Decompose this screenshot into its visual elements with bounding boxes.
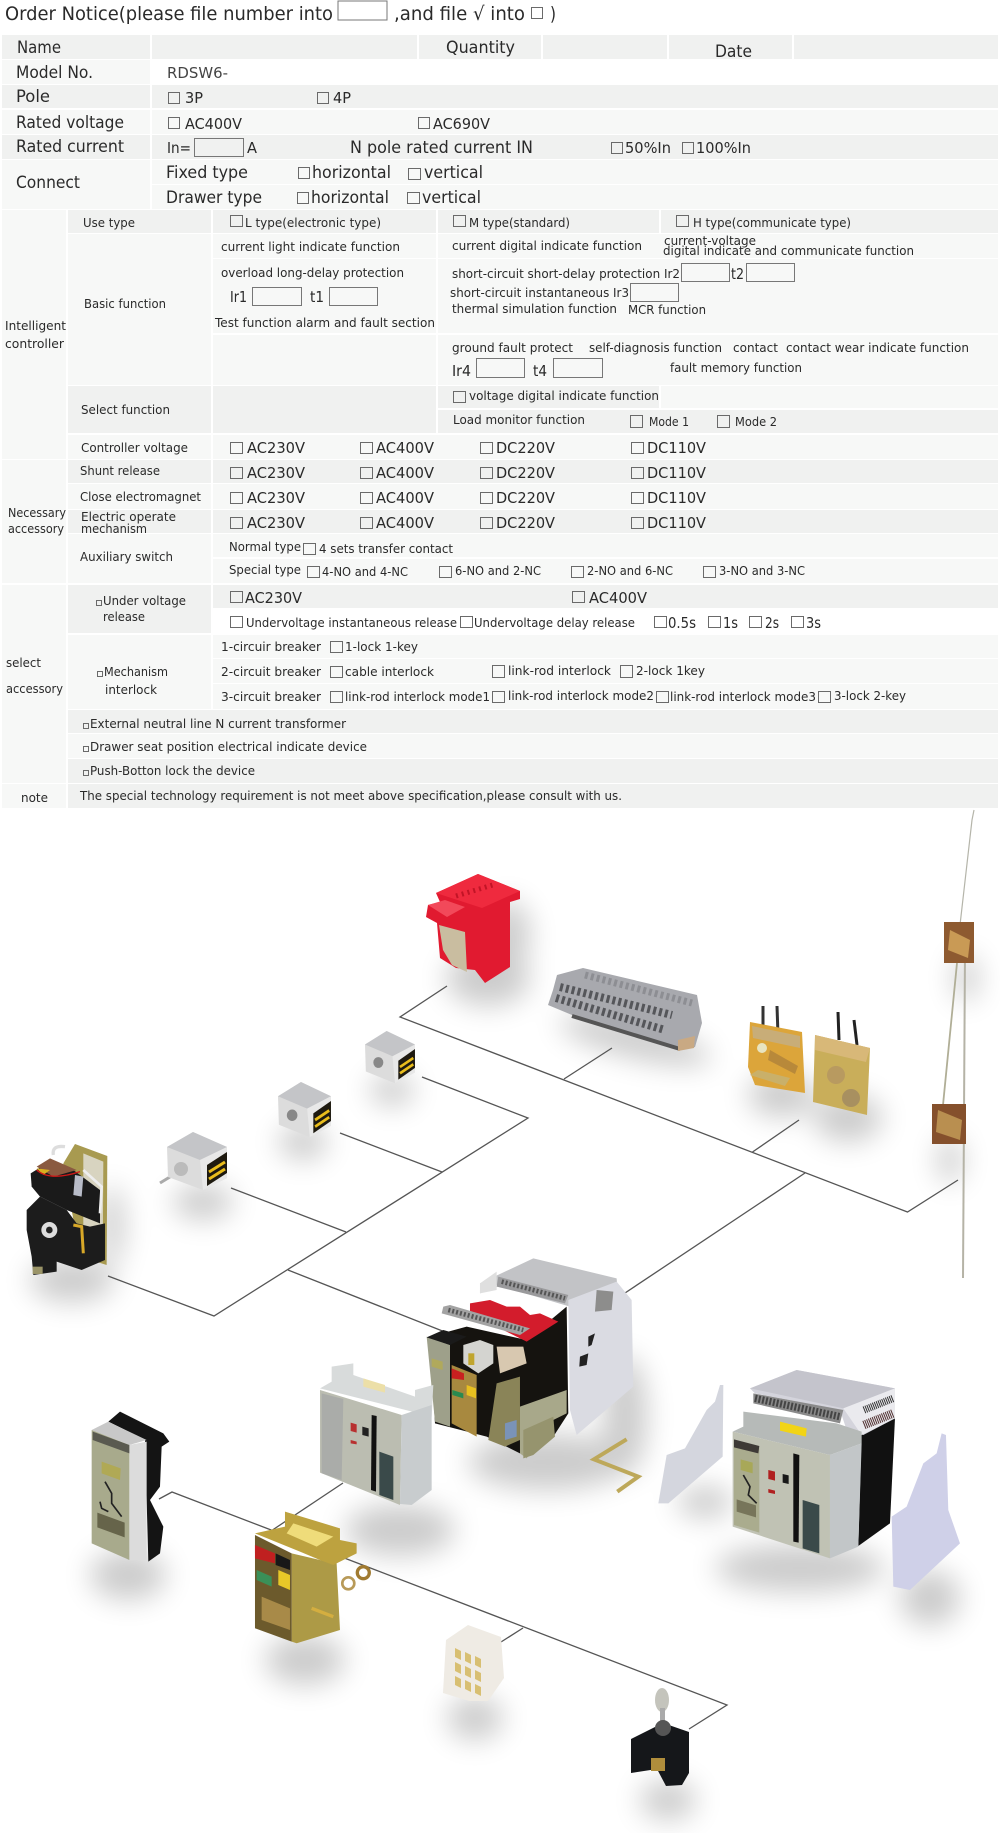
title: order notice heading: ,and file √ into [394,3,525,25]
row: under voltage release: 0.5s [668,614,696,632]
row: note [2,784,998,808]
row: shunt release: DC110V [647,464,707,482]
row: controller voltage: DC220V [496,439,556,457]
row: auxiliary switch: Special type [229,562,301,577]
row: mechanism interlock: 2-lock 1key [636,663,706,678]
product: link rods with brackets [932,810,974,1278]
row: auxiliary switch: 4-NO and 4-NC [322,564,408,579]
row: use type: Use type [83,215,135,230]
row: close electromagnet: Close electromagnet [80,489,201,504]
row: basic function: fault memory function [670,360,802,375]
row: basic function [68,233,998,385]
row: rated current [2,135,998,159]
row: auxiliary switch: 3-NO and 3-NC [719,563,805,578]
row: basic function: current light indicate function [221,239,400,254]
row: mechanism interlock: 1-lock 1-key [345,639,419,654]
row: basic function: ground fault protect [452,340,573,355]
bracket upper [944,922,974,963]
row: mechanism interlock: cable interlock [345,664,435,679]
product: white secondary connector [443,1625,504,1701]
product: small solenoid box C with shaft [160,1132,227,1190]
row: rated current: In= [167,139,191,157]
row: pole: Pole [16,87,50,106]
product: central breaker with open cover [320,1258,638,1505]
row: name quantity date [2,35,998,61]
row: electric operate mechanism: DC110V [647,514,707,532]
row: close electromagnet: DC110V [647,489,707,507]
row: basic function: t4 [533,362,547,380]
row: under voltage release: Undervoltage delay release [474,615,635,630]
row: auxiliary switch [68,534,998,583]
row: model number [2,60,228,84]
product: assembled breaker with side plates [658,1370,960,1590]
breaker body [733,1370,895,1558]
plate two [813,1012,870,1115]
row: mechanism interlock: link-rod interlock mode1 [345,689,490,704]
panel: necessary accessory [2,460,998,583]
row: name quantity date: Quantity [446,38,515,57]
panel: necessary accessory: accessory [8,521,65,536]
row: push-button lock: Push-Botton lock the device [90,763,255,778]
row: close electromagnet [68,484,998,509]
row: basic function: self-diagnosis function [589,340,722,355]
panel: intelligent controller [2,210,998,459]
row: rated voltage [2,110,998,134]
product: red release coil [426,874,520,983]
row: external neutral line transformer: External neutral line N current transformer [90,716,347,731]
row: basic function: MCR function [628,302,706,317]
row: under voltage release: 3s [806,614,821,632]
row: basic function: Ir4 [452,362,471,380]
row: shunt release: AC230V [247,464,306,482]
row: controller voltage [68,435,998,459]
row: external neutral line transformer [68,710,998,733]
panel: select accessory: accessory [6,681,64,696]
panel: select accessory: select [6,655,41,670]
row: close electromagnet: AC230V [247,489,306,507]
product: gold mechanism frame [255,1512,369,1643]
row: under voltage release: Undervoltage instantaneous release [246,615,457,630]
row: select function: Mode 2 [735,414,777,429]
row: under voltage release: AC230V [245,589,303,607]
row: close electromagnet: DC220V [496,489,556,507]
row: use type: M type(standard) [469,215,570,230]
row: mechanism interlock: Mechanism [104,664,168,679]
row: electric operate mechanism: DC220V [496,514,556,532]
row: connect: horizontal [311,188,389,207]
row: name quantity date: Name [17,38,61,57]
product: small solenoid box A [365,1031,415,1083]
row: connect: Fixed type [166,163,248,182]
row: rated voltage: AC690V [433,115,491,133]
row: basic function: digital indicate and communicate function [663,243,914,258]
row: drawer seat position device: Drawer seat position electrical indicate device [90,739,367,754]
row: basic function: Basic function [84,296,166,311]
row: use type: H type(communicate type) [693,215,851,230]
crank handle [594,1439,638,1492]
row: under voltage release: release [103,609,145,624]
row: shunt release [68,460,998,483]
row: basic function: overload long-delay protection [221,265,404,280]
row: under voltage release: Under voltage [103,593,186,608]
drop shadows under products [30,900,978,1820]
row: rated voltage: AC400V [185,115,243,133]
row: close electromagnet: AC400V [376,489,435,507]
row: basic function: contact [733,340,778,355]
row: basic function: Test function alarm and fault section [214,315,435,330]
row: auxiliary switch: Normal type [229,539,301,554]
product: small solenoid box B [278,1082,331,1137]
row: model number: RDSW6- [167,64,228,82]
row: note: note [21,790,48,805]
row: mechanism interlock: 1-circuir breaker [221,639,322,654]
row: select function: voltage digital indicate function [469,388,659,403]
removable front cover [320,1363,433,1505]
row: mechanism interlock: link-rod interlock [508,663,612,678]
row: basic function: t1 [310,288,324,306]
row: controller voltage: DC110V [647,439,707,457]
row: connect: Drawer type [166,188,262,207]
panel: necessary accessory: Necessary [8,505,67,520]
row: mechanism interlock: interlock [105,682,158,697]
row: push-button lock [68,759,998,783]
row: auxiliary switch: 2-NO and 6-NC [587,563,673,578]
row: mechanism interlock: link-rod interlock mode3 [670,689,816,704]
row: basic function: thermal simulation function [452,301,617,316]
row: model number: Model No. [16,63,93,82]
row: select function: Load monitor function [453,412,585,427]
row: name quantity date: Date [715,42,752,61]
row: connect: vertical [422,188,481,207]
row: pole [2,85,998,108]
right side plate [892,1433,960,1590]
row: mechanism interlock: 3-circuit breaker [221,689,322,704]
row: shunt release: AC400V [376,464,435,482]
panel: select accessory [2,585,998,783]
row: select function: Mode 1 [649,414,689,429]
row: under voltage release: 1s [723,614,738,632]
row: rated current: Rated current [16,137,125,156]
row: controller voltage: AC230V [247,439,306,457]
row: controller voltage: Controller voltage [81,440,188,455]
product: intelligent controller unit [92,1412,169,1562]
row: rated current: A [247,139,258,157]
row: mechanism interlock: 2-circuit breaker [221,664,322,679]
product: grey terminal block [548,968,702,1051]
title: order notice heading: Order Notice(please file number into [5,3,333,25]
title: order notice heading: ) [550,3,556,25]
row: use type: L type(electronic type) [245,215,381,230]
product: key lock [631,1688,689,1786]
row: rated current: 100%In [696,139,751,157]
row: mechanism interlock: link-rod interlock mode2 [508,688,654,703]
row: under voltage release: AC400V [589,589,648,607]
row: under voltage release [68,585,998,633]
row: shunt release: DC220V [496,464,556,482]
row: controller voltage: AC400V [376,439,435,457]
row: basic function: short-circuit short-delay protection Ir2 [452,266,680,281]
connector lines between components [108,986,958,1729]
panel: basic order information table [2,35,998,209]
title: order notice heading [5,1,556,25]
bracket lower [932,1104,966,1144]
panel: intelligent controller: Intelligent [5,318,66,333]
row: connect: Connect [16,173,80,192]
row: auxiliary switch: 6-NO and 2-NC [455,563,541,578]
row: basic function: t2 [731,265,744,283]
row: mechanism interlock: 3-lock 2-key [834,688,907,703]
row: pole: 3P [185,89,203,107]
row: electric operate mechanism: mechanism [81,521,147,536]
row: connect: horizontal [312,163,391,182]
row: electric operate mechanism: AC400V [376,514,435,532]
row: electric operate mechanism: Electric operate [81,509,176,524]
panel: intelligent controller: controller [5,336,65,351]
row: use type [68,210,998,233]
row: basic function: current-voltage [664,233,756,248]
row: basic function: short-circuit instantaneous Ir3 [450,285,629,300]
row: connect: vertical [424,163,483,182]
row: select function: Select function [81,402,170,417]
row: rated current: 50%In [625,139,671,157]
product: electric motor mechanism [27,1144,107,1275]
row: note: The special technology requirement is not meet above specification,please consult with us. [79,788,622,803]
row: pole: 4P [333,89,351,107]
row: select function [68,386,998,433]
left side plate [658,1385,723,1503]
row: connect [2,160,998,209]
row: rated current: N pole rated current IN [350,138,533,157]
row: under voltage release: 2s [765,614,779,632]
row: basic function: current digital indicate function [452,238,642,253]
row: auxiliary switch: Auxiliary switch [80,549,173,564]
row: electric operate mechanism: AC230V [247,514,306,532]
product: gold auxiliary plates [748,1006,870,1115]
row: electric operate mechanism [68,509,998,536]
row: basic function: contact wear indicate function [786,340,969,355]
row: rated voltage: Rated voltage [16,113,124,132]
plate one [748,1006,805,1093]
row: drawer seat position device [68,734,998,758]
row: basic function: Ir1 [230,288,247,306]
row: auxiliary switch: 4 sets transfer contact [319,541,453,556]
row: mechanism interlock [68,635,998,709]
row: shunt release: Shunt release [80,463,160,478]
